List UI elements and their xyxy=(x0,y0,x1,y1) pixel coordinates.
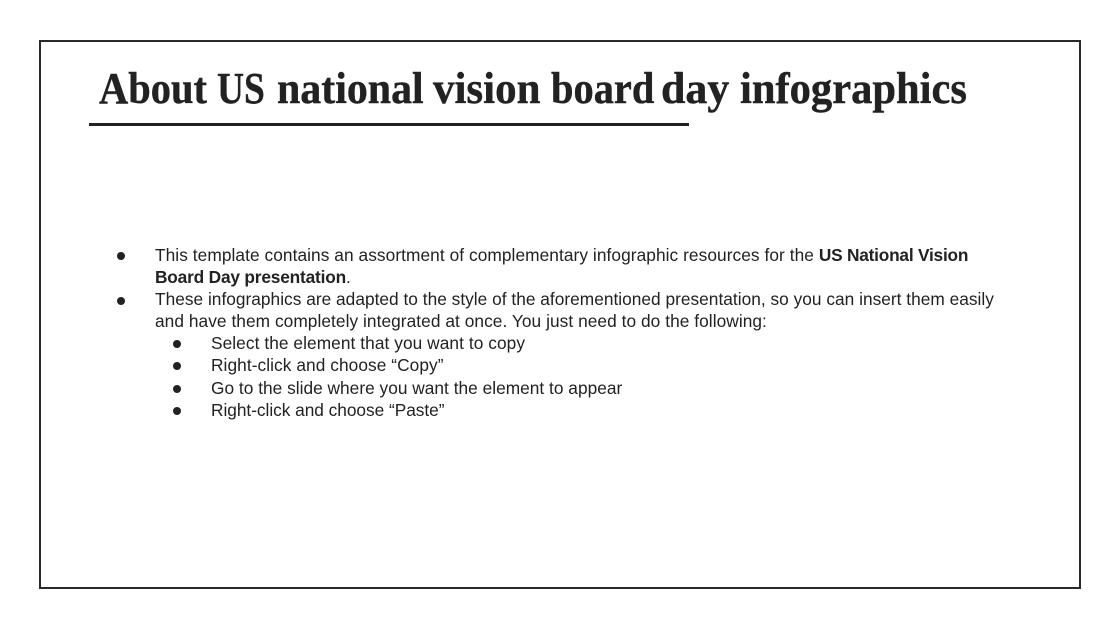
bullet: template description xyxy=(117,245,968,287)
title: About xyxy=(99,64,207,112)
bullet list xyxy=(117,245,994,420)
bullet: how the infographics adapt: and have them completely integrated at once. You just need to do the following: xyxy=(155,311,767,331)
sub-bullet: paste: Right-click and choose “Paste” xyxy=(211,400,444,420)
title: board xyxy=(551,64,655,112)
sub-bullet: select: Select the element that you want to copy xyxy=(211,333,525,353)
bullet: how the infographics adapt xyxy=(117,289,994,331)
title: national xyxy=(276,64,423,112)
bullet: template description: Board Day presentation. xyxy=(155,267,351,287)
sub-bullet: copy: Right-click and choose “Copy” xyxy=(211,355,444,375)
title: vision xyxy=(433,64,541,112)
title underline xyxy=(88,123,689,126)
title xyxy=(99,64,967,113)
sub-bullet: go to slide: Go to the slide where you want the element to appear xyxy=(211,378,622,398)
title: US xyxy=(217,64,264,112)
bullet: template description: This template contains an assortment of complementary infographic resources for the US National Vision xyxy=(155,245,968,265)
title: infographics xyxy=(740,64,967,112)
title: day xyxy=(661,64,730,112)
bullet: how the infographics adapt: These infographics are adapted to the style of the aforementioned presentation, so you can insert them easily xyxy=(155,289,994,309)
